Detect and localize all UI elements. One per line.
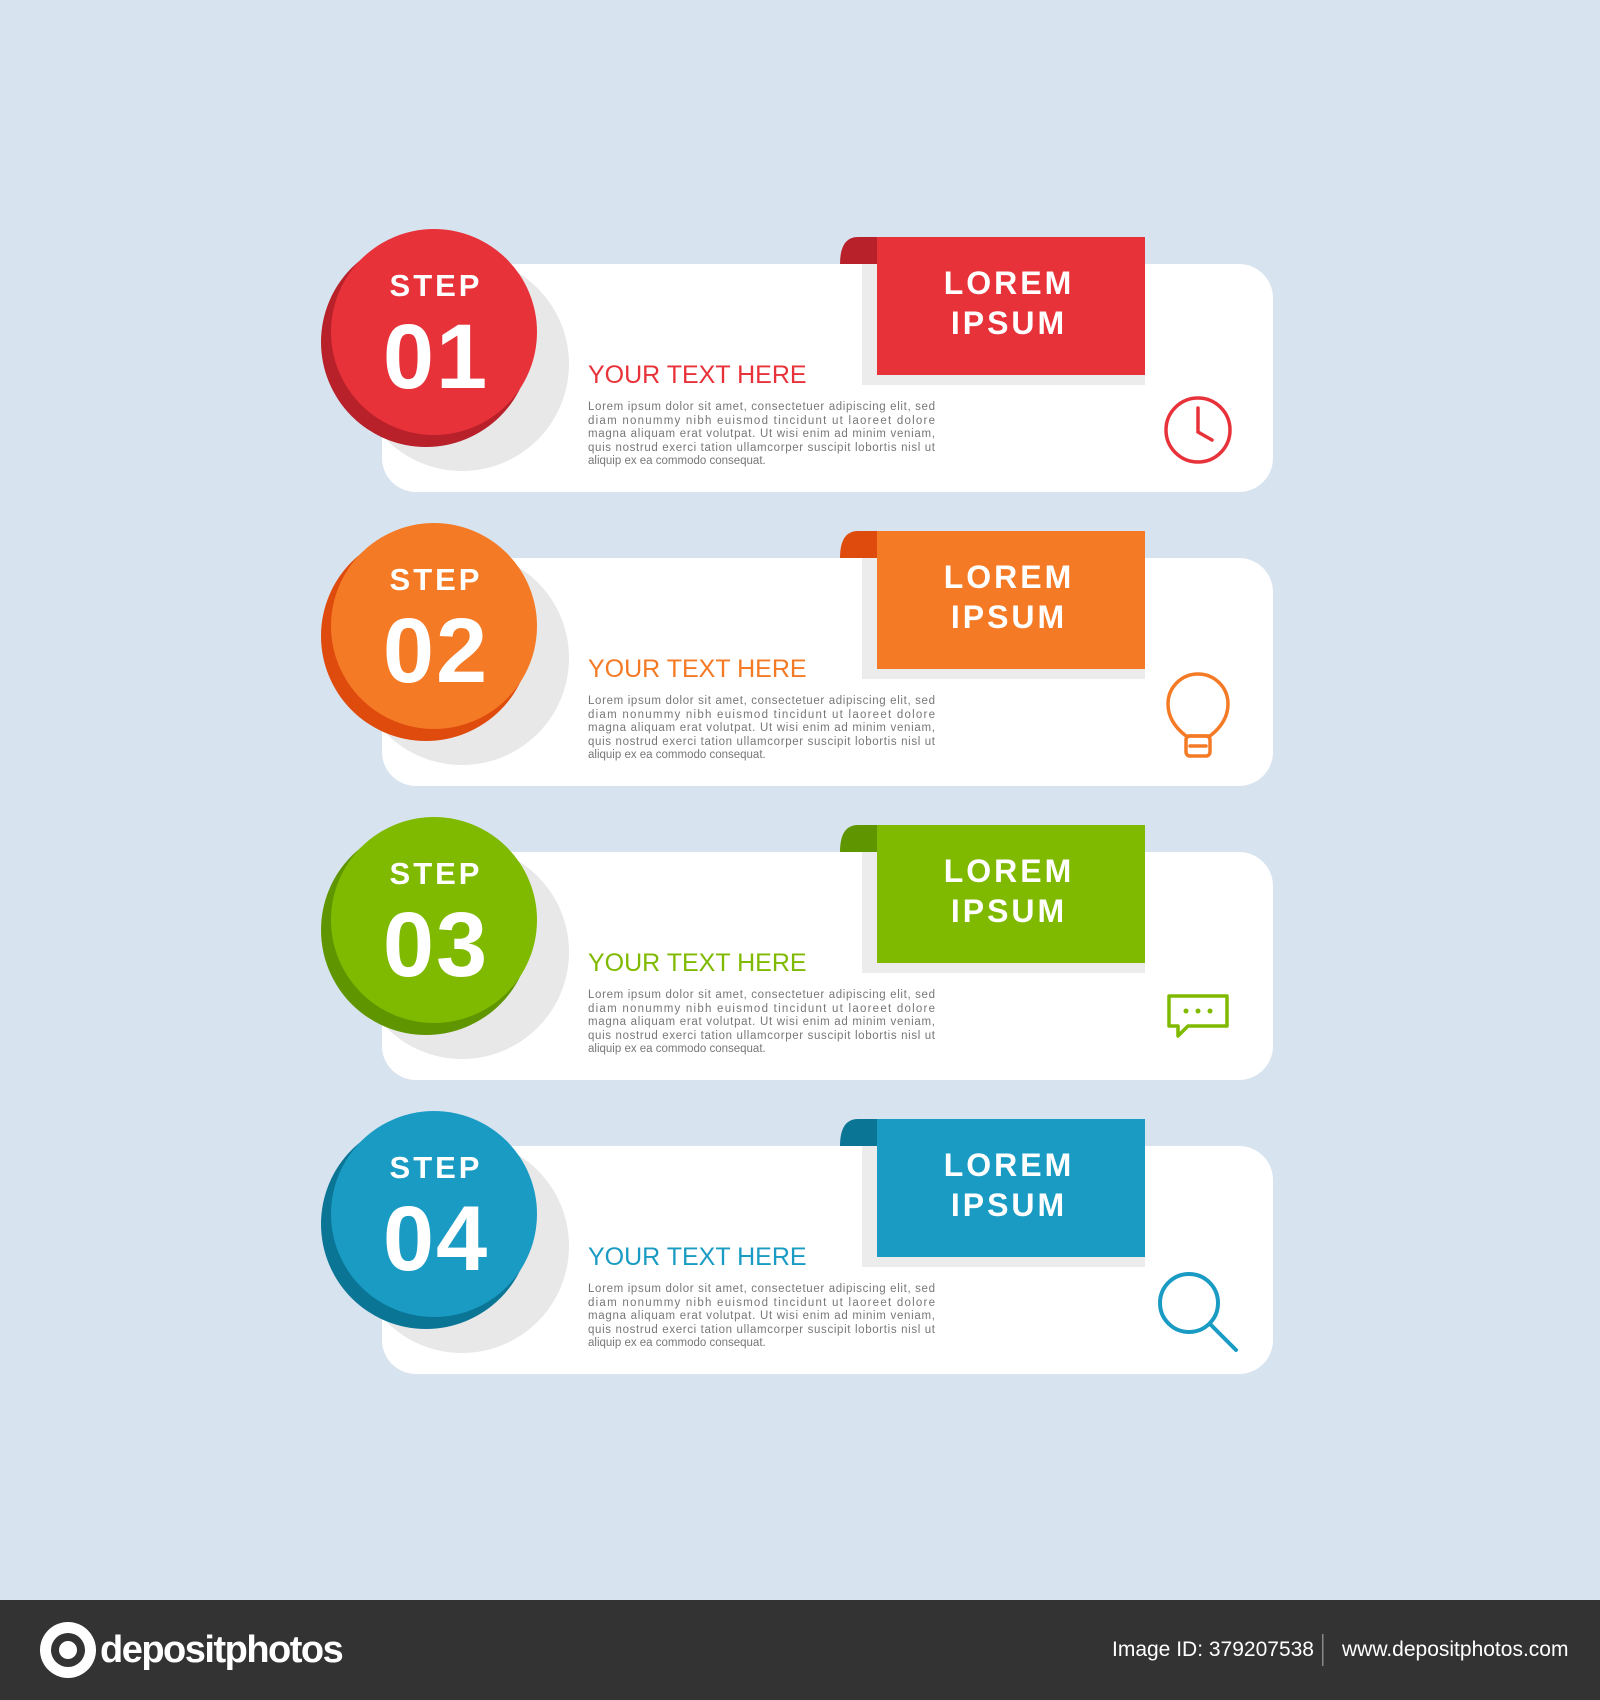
circle shadow: [355, 257, 569, 471]
body text 1: [588, 401, 936, 467]
footer url: www.depositphotos.com: [1341, 1638, 1568, 1661]
step badge 3: 03: [383, 894, 489, 996]
tab 2: LOREM: [944, 559, 1074, 595]
step badge 2: [321, 523, 537, 741]
body text 2: magna aliquam erat volutpat. Ut wisi enim ad minim veniam,: [588, 722, 935, 734]
step badge 2: STEP: [390, 562, 482, 597]
body text 2: quis nostrud exerci tation ullamcorper suscipit lobortis nisl ut: [588, 736, 936, 748]
body text 1: magna aliquam erat volutpat. Ut wisi enim ad minim veniam,: [588, 428, 935, 440]
tab 1: LOREM: [944, 265, 1074, 301]
body text 3: diam nonummy nibh euismod tincidunt ut laoreet dolore: [588, 1003, 935, 1015]
tab 3: LOREM: [944, 853, 1074, 889]
body text 3: [588, 989, 936, 1055]
body text 3: aliquip ex ea commodo consequat.: [588, 1043, 766, 1055]
tab 4: LOREM: [944, 1147, 1074, 1183]
icon: chat bubble: [1169, 996, 1227, 1036]
card 1: [382, 264, 1273, 492]
body text 2: aliquip ex ea commodo consequat.: [588, 749, 766, 761]
step badge 4: STEP: [390, 1150, 482, 1185]
footer image id: Image ID: 379207538: [1112, 1638, 1314, 1661]
icon: light bulb: [1168, 674, 1228, 756]
icon: magnifier: [1160, 1274, 1236, 1350]
tab 3: [840, 825, 1145, 973]
step badge 3: [321, 817, 537, 1035]
step badge 4: 04: [383, 1188, 489, 1290]
body text 3: quis nostrud exerci tation ullamcorper suscipit lobortis nisl ut: [588, 1030, 936, 1042]
circle shadow: [355, 1139, 569, 1353]
step 1: [321, 229, 1273, 492]
step 4: [321, 1111, 1273, 1374]
tab 4: [840, 1119, 1145, 1267]
body text 4: quis nostrud exerci tation ullamcorper suscipit lobortis nisl ut: [588, 1324, 936, 1336]
tab 2: [840, 531, 1145, 679]
circle shadow: [355, 551, 569, 765]
body text 3: magna aliquam erat volutpat. Ut wisi enim ad minim veniam,: [588, 1016, 935, 1028]
body text 1: Lorem ipsum dolor sit amet, consectetuer adipiscing elit, sed: [588, 401, 935, 413]
step 3: [321, 817, 1273, 1080]
heading 4: YOUR TEXT HERE: [588, 1243, 807, 1271]
body text 1: diam nonummy nibh euismod tincidunt ut laoreet dolore: [588, 415, 935, 427]
card 4: [382, 1146, 1273, 1374]
body text 4: magna aliquam erat volutpat. Ut wisi enim ad minim veniam,: [588, 1310, 935, 1322]
tab 4: IPSUM: [951, 1187, 1067, 1223]
body text 4: [588, 1283, 936, 1349]
footer bar: [0, 1600, 1600, 1700]
body text 1: quis nostrud exerci tation ullamcorper suscipit lobortis nisl ut: [588, 442, 936, 454]
body text 4: aliquip ex ea commodo consequat.: [588, 1337, 766, 1349]
tab 2: IPSUM: [951, 599, 1067, 635]
step 2: [321, 523, 1273, 786]
body text 2: diam nonummy nibh euismod tincidunt ut laoreet dolore: [588, 709, 935, 721]
step badge 2: 02: [383, 600, 489, 702]
body text 4: Lorem ipsum dolor sit amet, consectetuer adipiscing elit, sed: [588, 1283, 935, 1295]
tab 1: [840, 237, 1145, 385]
body text 3: Lorem ipsum dolor sit amet, consectetuer adipiscing elit, sed: [588, 989, 935, 1001]
step badge 1: 01: [383, 306, 489, 408]
footer logo: depositphotos: [100, 1629, 343, 1671]
heading 1: YOUR TEXT HERE: [588, 361, 807, 389]
footer logo: [40, 1622, 343, 1678]
step badge 1: STEP: [390, 268, 482, 303]
body text 2: [588, 695, 936, 761]
step badge 4: [321, 1111, 537, 1329]
step badge 1: [321, 229, 537, 447]
body text 4: diam nonummy nibh euismod tincidunt ut laoreet dolore: [588, 1297, 935, 1309]
tab 1: IPSUM: [951, 305, 1067, 341]
heading 2: YOUR TEXT HERE: [588, 655, 807, 683]
icon: clock: [1166, 398, 1230, 462]
body text 2: Lorem ipsum dolor sit amet, consectetuer adipiscing elit, sed: [588, 695, 935, 707]
card 3: [382, 852, 1273, 1080]
body text 1: aliquip ex ea commodo consequat.: [588, 455, 766, 467]
heading 3: YOUR TEXT HERE: [588, 949, 807, 977]
circle shadow: [355, 845, 569, 1059]
step badge 3: STEP: [390, 856, 482, 891]
tab 3: IPSUM: [951, 893, 1067, 929]
card 2: [382, 558, 1273, 786]
